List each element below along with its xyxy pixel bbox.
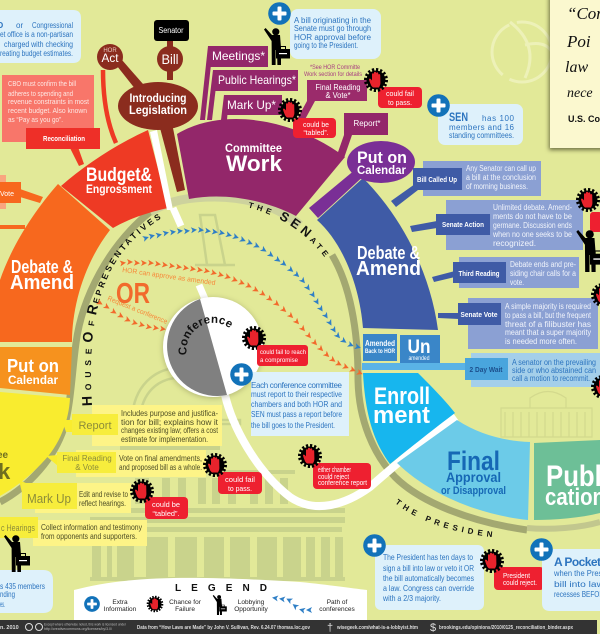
connector: HOR act to budget [103, 70, 116, 143]
stage: amended back to HOR [363, 334, 397, 361]
stage: budget and engrossment: Engrossment [86, 182, 152, 196]
callout: reconciliation: revenue constraints in most [8, 97, 90, 106]
label: could fail to reach a compromise: a compromise [260, 357, 298, 364]
stage: debate and amend (house): Debate & [11, 257, 73, 277]
callout: mark up [19, 480, 131, 513]
callout: pocket veto: bill into law [554, 580, 600, 589]
legend: lobbying opportunity: Opportunity [234, 606, 269, 613]
label: see committee note [304, 64, 363, 78]
label: either chamber could reject: could reject [318, 474, 349, 481]
path: blue conference arrows [146, 230, 358, 347]
legend: extra information: Extra [112, 599, 128, 606]
label: president could reject: President [503, 573, 530, 580]
callout: reconciliation: Reconciliation [43, 136, 85, 143]
label: request a conference: Request a conference [106, 295, 168, 326]
callout: senate bill note: going to the President. [294, 41, 358, 50]
label: could fail to pass (senate): could fail [386, 89, 414, 98]
legend: path of conferences: Path of [327, 599, 347, 606]
callout: senate action: Senate Action [442, 222, 484, 229]
stage: final approval: Final [447, 446, 500, 476]
icon: extra info, pocket veto [530, 538, 553, 561]
node: senator: Senator [158, 26, 184, 35]
label: president could reject: could reject. [503, 580, 537, 587]
legend: chance for failure: Chance for [169, 599, 202, 606]
label: could be tabled (house): “tabled”. [152, 509, 180, 518]
callout: senate vote: is needed more often. [505, 337, 577, 346]
node: introducing legislation: Introducing [130, 91, 186, 105]
label: report (senate): Report* [354, 119, 380, 128]
note: constitution quote: Poi [566, 32, 591, 51]
callout: senate bill note: Senate must go through [294, 24, 371, 33]
label: could fail to reach a compromise: could fail to reach [260, 349, 306, 356]
node: HOR act [97, 44, 123, 70]
callout: pocket veto: A Pocket [554, 555, 600, 569]
label: public hearings: Public Hearings* [218, 73, 296, 87]
stage: enrollment: ment [373, 402, 430, 429]
callout: SEN members: SEN [449, 110, 468, 124]
legend: extra information: Information [104, 606, 137, 613]
callout: report: changes existing law; offers a cost [121, 426, 219, 435]
panel: legend [74, 578, 367, 621]
stage: budget and engrossment: Budget& [86, 165, 152, 186]
callout: two day wait [362, 353, 600, 387]
callout: senate action: Unlimited debate. Amend- [493, 203, 572, 212]
callout: conference committee: the bill goes to the President. [251, 421, 335, 430]
callout: senate action: germane. Discussion ends [493, 221, 572, 230]
callout: report [62, 405, 222, 446]
callout: bill called up: Any Senator can call up [466, 164, 536, 173]
background capitol building [90, 445, 345, 581]
node: bill [157, 46, 183, 72]
callout: SEN members: standing committees. [449, 131, 514, 140]
callout: conference committee: must report to their respective [251, 390, 342, 399]
stage: enrollment [363, 373, 455, 464]
gray arch ring [0, 197, 600, 530]
label: president could reject [494, 567, 544, 590]
stage: debate and amend (house): Amend [10, 272, 74, 294]
node: HOR act: HOR [103, 48, 117, 54]
stage: final approval: Approval [446, 469, 501, 485]
note: constitution quote: law [565, 59, 588, 76]
callout: bill called up: of morning business. [466, 182, 528, 191]
stage: put on calendar (senate) [347, 141, 415, 183]
legend: lobbying opportunity [213, 595, 269, 615]
label: final reading and vote (senate) [294, 80, 367, 125]
label: final reading and vote (senate): Final Reading [316, 83, 360, 92]
stage: budget and engrossment [61, 130, 168, 228]
white band at introducing legislation [150, 130, 173, 210]
label: either chamber could reject: either chamber [318, 467, 351, 474]
callout: third reading [432, 257, 579, 288]
callout: SEN members: members and 16 [449, 123, 515, 132]
callout: senate action: ments do not have to be [493, 212, 572, 221]
callout: CBO note: et office is a non-partisan [0, 30, 73, 39]
callout: mark up: Edit and revise to [79, 490, 128, 499]
stage: amended back to HOR: Back to HOR [365, 349, 396, 355]
node: introducing legislation [118, 82, 198, 130]
stage: unamended: Un [408, 337, 430, 358]
label: either chamber could reject: conference report [318, 480, 367, 487]
stage: debate and amend (senate): Debate & [357, 243, 420, 263]
callout: SEN members [438, 104, 523, 145]
label: could fail to reach a compromise [257, 345, 308, 366]
callout: final reading and vote: Vote on final amendments, [119, 454, 202, 463]
callout: president [375, 545, 484, 610]
icon: failure, recommit [592, 376, 600, 398]
callout: conference committee: chambers and both HOR and [251, 400, 342, 409]
connector: senate committee labels to committee work [200, 46, 229, 120]
stage: put on calendar (senate): Calendar [357, 163, 406, 177]
callout: bill called up [391, 161, 541, 207]
callout: house membership: nding [0, 590, 15, 599]
callout: report: tion for bill; explains how it [121, 418, 219, 427]
stage: final approval: or Disapproval [441, 485, 506, 497]
stage: committee work (senate): Work [226, 151, 283, 176]
callout: report: estimate for implementation. [121, 435, 208, 444]
stage: unamended [400, 335, 440, 363]
label: could fail (right edge) [590, 212, 600, 232]
footer bar: Data from “How Laws are Made” by John V. Sullivan, Rev. 6.24.07 thomas.loc.gov [137, 625, 311, 631]
callout: CBO note: reating budget estimates. [0, 49, 73, 58]
node: introducing legislation: Legislation [129, 103, 187, 117]
callout: final reading and vote: and proposed bill as a whole. [119, 463, 202, 472]
icon: failure, conference report [300, 446, 320, 466]
connector: put on calendar to debate [309, 164, 368, 218]
stage: final approval [397, 420, 530, 520]
legend: chance for failure: Failure [175, 606, 195, 613]
callout: reconciliation: as “Pay as you go”. [8, 115, 63, 124]
label: could fail to pass (house): to pass. [228, 484, 252, 493]
callout: reconciliation: adheres to spending and [8, 89, 73, 98]
callout: house membership: s 435 members [0, 582, 45, 591]
callout: president: with a 2/3 majority. [382, 593, 441, 603]
callout: CBO note: or [16, 21, 23, 30]
legend: extra information [84, 596, 137, 613]
node: bill: Bill [162, 51, 178, 67]
label: could be tabled (house): could be [152, 500, 180, 509]
heading: the president: THE PRESIDENT [396, 498, 492, 537]
icon: extra info, senate bill [268, 2, 291, 25]
note: constitution quote [550, 0, 600, 148]
footer bar: n. 2010 [0, 625, 19, 631]
callout: senate bill note: A bill originating in the [294, 16, 372, 25]
label: could be tabled (senate): could be [303, 120, 329, 129]
background capitol dome [120, 215, 240, 424]
label: either chamber could reject [313, 463, 371, 489]
callout: house membership: es. [0, 600, 5, 609]
connector: legislation to ring [160, 128, 185, 192]
legend: lobbying opportunity: Lobbying [238, 599, 265, 606]
callout: third reading: Debate ends and pre- [510, 260, 576, 269]
icon: lobbying, senate action [576, 230, 600, 272]
heading: the senate: THE SENATE [249, 202, 328, 257]
callout: public hearings: from opponents and supporters. [41, 532, 137, 541]
stage: put on calendar (senate): Put on [357, 148, 407, 167]
icon: lobbying, senate bill [264, 28, 290, 65]
panel: president stage [363, 373, 600, 520]
footer bar: brookings.edu/opinions/2010/0125_reconciliation_binder.aspx [439, 625, 574, 631]
label: mark up [224, 95, 282, 115]
label: vote: Vote [0, 191, 14, 198]
callout: reconciliation: CBO must confirm the bill [8, 79, 76, 88]
label: could fail to pass (senate) [378, 87, 422, 108]
legend: path of conferences [275, 598, 355, 613]
callout: house membership [0, 570, 53, 613]
connector: senator to bill to legislation [167, 40, 173, 80]
callout: senate bill note [290, 9, 381, 59]
callout: CBO note: Congressional [32, 21, 73, 30]
connector: reconciliation [70, 147, 84, 166]
node: conference circle [160, 295, 266, 401]
stage: amended back to HOR: Amended [365, 339, 395, 348]
footer bar: http://creativecommons.org/licenses/by/3.0/ [44, 627, 112, 631]
stage: put on calendar (house): Put on [7, 356, 59, 376]
callout: mark up: Mark Up [27, 491, 71, 506]
label: meetings: Meetings* [212, 49, 265, 63]
callout: final reading and vote: & Vote [75, 463, 99, 472]
label: HOR can approve: HOR can approve as amended [122, 267, 216, 287]
legend heading: LEGEND [175, 583, 267, 594]
icon: failure, conference [244, 328, 264, 348]
label: OR: OR [116, 278, 150, 310]
node: senator [154, 20, 189, 41]
stage: put on calendar (house): Calendar [8, 373, 58, 387]
callout: president: a law. Congress can override [383, 583, 474, 593]
stage: committee work (house) [0, 392, 70, 496]
icon: failure, final reading (house) [204, 454, 226, 476]
callout: final reading and vote [46, 450, 206, 477]
callout: president: sign a bill into law or veto it OR [383, 563, 474, 573]
node: conference circle: Conference [178, 316, 232, 355]
callout: president: the bill automatically becomes [383, 573, 474, 583]
label: could fail to pass (house): could fail [225, 475, 255, 484]
node: HOR act: Act [102, 51, 119, 65]
icon: failure, senate vote [592, 284, 600, 306]
legend: path of conferences: conferences [319, 606, 355, 613]
footer bar: wisegeek.com/what-is-a-lobbyist.htm [336, 625, 418, 631]
footer bar: $ [430, 622, 436, 634]
callout: pocket veto [542, 549, 600, 611]
callout: two day wait: 2 Day Wait [470, 365, 503, 374]
label: could be tabled (house) [145, 497, 188, 519]
stage: debate and amend (senate): Amend [356, 258, 421, 280]
label: see committee note: *See HOR Committe [310, 64, 360, 71]
callout: final reading and vote: Final Reading [62, 454, 112, 463]
label: vote [0, 175, 43, 209]
icon: failure, mark up (house) [132, 480, 152, 502]
label: report (senate) [337, 113, 388, 158]
icon: failure, senate action [578, 190, 598, 210]
icon: extra info, president [363, 534, 386, 557]
connector: act to introducing legislation [117, 60, 143, 90]
path: upper orange conference arrows [123, 262, 360, 373]
label: could fail to pass (senate): to pass. [388, 98, 412, 107]
callout: senate bill note: HOR approval before [294, 33, 372, 42]
callout: third reading: vote. [510, 278, 524, 287]
callout: senate vote [438, 298, 598, 349]
callout: senate vote: threat of a filibuster has [505, 320, 591, 329]
callout: report: Report [78, 420, 112, 432]
callout: conference committee [251, 372, 349, 436]
path: lower orange conference arrows [100, 303, 163, 329]
callout: public hearings: Collect information and testimony [41, 523, 142, 532]
callout: CBO note [0, 10, 81, 63]
footer bar: Except where otherwise noted, this work is licensed under [44, 622, 127, 626]
label: final reading and vote (senate): & Vote* [326, 91, 350, 100]
background white house [501, 392, 592, 437]
callout: third reading: siding chair calls for a [510, 269, 576, 278]
label: could be tabled (senate): “tabled”. [304, 128, 328, 137]
icon: failure, president [482, 550, 502, 572]
stage: unamended: amended [408, 356, 430, 362]
callout: senate vote: meant that a super majority [505, 328, 591, 337]
label: meetings [208, 46, 268, 67]
white path line [173, 208, 456, 506]
callout: public hearings: c Hearings [1, 523, 35, 533]
callout: senate action: when no one seeks to be [492, 230, 572, 239]
note: constitution quote: nece [567, 86, 593, 101]
label: see committee note: Work section for details [304, 71, 363, 78]
icon: extra info, conference [230, 363, 253, 386]
callout: reconciliation: recent budget. Also known [8, 106, 87, 115]
callout: mark up: reflect hearings. [79, 499, 126, 508]
callout: third reading: Third Reading [458, 271, 500, 278]
callout: reconciliation [2, 75, 100, 149]
icon: failure, mark up [280, 100, 300, 120]
icon: extra info, SEN [427, 94, 450, 117]
callout: conference committee: Each conference committee [251, 381, 343, 390]
icon: failure, final reading [366, 70, 386, 90]
callout: senate action: recognized. [493, 239, 536, 248]
footer bar: † [327, 622, 333, 634]
stage: debate and amend (house) [0, 184, 110, 342]
callout: senate action [410, 200, 583, 250]
callout: senate vote: Senate Vote [460, 312, 498, 319]
callout: president: The President has ten days to [383, 552, 473, 562]
footer bar [0, 620, 597, 634]
label: public hearings [213, 70, 298, 91]
label: mark up: Mark Up* [227, 98, 276, 112]
stage: publication [534, 440, 600, 520]
stage: enrollment: Enroll [374, 383, 430, 410]
stage: committee work (senate): Committee [225, 141, 282, 155]
stage: committee work (senate) [177, 119, 345, 216]
background seal swirl [492, 22, 552, 82]
stage: debate and amend (senate) [317, 178, 438, 330]
callout: bill called up: a bill at the conclusion [466, 173, 536, 182]
callout: public hearings [0, 517, 147, 546]
callout: SEN members: has 100 [482, 114, 515, 123]
icon: lobbying, hearings [4, 535, 30, 572]
label: could fail to pass (house) [218, 472, 262, 494]
legend: chance for failure [148, 597, 202, 613]
callout: CBO note: charged with checking [4, 40, 73, 49]
callout: report: Includes purpose and justifica- [121, 409, 218, 418]
callout: bill called up: Bill Called Up [417, 177, 457, 184]
stage: put on calendar (house) [0, 347, 72, 395]
callout: conference committee: SEN must pass a report before [251, 410, 342, 419]
heading: house of representatives: H O U S E O F REPRESENTATIVES [82, 214, 160, 406]
label: could be tabled (senate) [293, 118, 336, 138]
